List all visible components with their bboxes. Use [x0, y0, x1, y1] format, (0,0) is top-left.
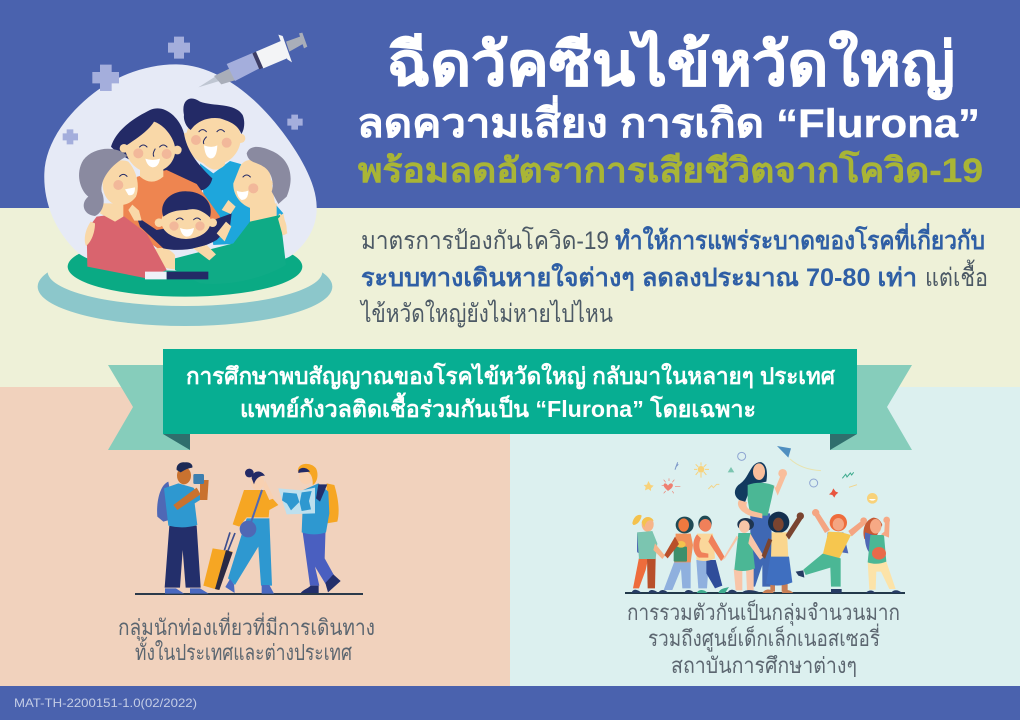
icon: plus signs: [63, 37, 303, 144]
title: [357, 29, 983, 190]
panel: footer bar: [0, 686, 1020, 720]
person: mother: [111, 108, 220, 250]
panel: cream intro: [0, 208, 1020, 388]
ground line: [625, 592, 905, 594]
child jumping: [796, 509, 867, 593]
panel: top blue header: [0, 0, 1020, 208]
child with ponytail: [632, 515, 665, 593]
text block: children caption: การรวมตัวกันเป็นกลุ่มจำนวนมาก: [627, 598, 900, 626]
platform base: [38, 237, 332, 326]
person: grandfather: [148, 147, 291, 284]
person: child: [128, 191, 236, 279]
text block: intro: ไข้หวัดใหญ่ยังไม่หายไปไหน: [359, 299, 613, 328]
child with red bag: [863, 517, 902, 593]
illustration: teacher and children: [625, 446, 905, 593]
child in yellow shirt: [693, 516, 729, 593]
traveller with suitcase: [203, 469, 278, 594]
person: grandmother: [79, 149, 167, 278]
child in green dress: [722, 518, 764, 593]
child in blue skirt: [762, 512, 804, 593]
illustration: travellers: [135, 462, 363, 594]
icon: syringe: [198, 33, 307, 87]
footer code: MAT-TH-2200151-1.0(02/2022): [14, 696, 197, 710]
text block: intro: ทำให้การแพร่ระบาดของโรคที่เกี่ยวกับ: [615, 223, 985, 255]
banner text: การศึกษาพบสัญญาณของโรคไข้หวัดใหญ่ กลับมาในหลายๆ ประเทศ: [186, 362, 835, 390]
panel: children background: [510, 387, 1020, 686]
text block: intro: [359, 223, 988, 328]
protective dome: [44, 64, 317, 271]
ground line: [135, 593, 363, 595]
banner text: [186, 362, 835, 422]
child with book: [658, 517, 694, 593]
illustration: family protected in dome: [38, 33, 332, 326]
title: ฉีดวัคซีนไข้หวัดใหญ่: [387, 29, 955, 100]
text block: children caption: [627, 598, 900, 678]
person: father: [182, 98, 283, 245]
text block: intro: แต่เชื้อ: [925, 259, 988, 292]
subtitle: ลดความเสี่ยง การเกิด “Flurona”: [357, 95, 980, 146]
text block: intro: มาตรการป้องกันโควิด-19: [361, 226, 609, 255]
text block: travellers caption: กลุ่มนักท่องเที่ยวที่มีการเดินทาง: [118, 612, 375, 641]
traveller with map: [278, 464, 341, 593]
text block: travellers caption: ทั้งในประเทศและต่างประเทศ: [135, 637, 352, 665]
text block: children caption: รวมถึงศูนย์เด็กเล็กเนอสเซอรี่: [648, 623, 880, 652]
panel: travellers background: [0, 387, 510, 686]
doodles: [644, 446, 878, 504]
subtitle: covid mortality: พร้อมลดอัตราการเสียชีวิตจากโควิด-19: [358, 150, 983, 190]
teacher: [735, 462, 787, 587]
banner text: แพทย์กังวลติดเชื้อร่วมกันเป็น “Flurona” โดยเฉพาะ: [240, 392, 756, 422]
text block: intro: ระบบทางเดินหายใจต่างๆ ลดลงประมาณ 70-80 เท่า: [361, 262, 917, 292]
text block: children caption: สถาบันการศึกษาต่างๆ: [671, 653, 857, 678]
text block: travellers caption: [118, 612, 375, 665]
ribbon banner: [108, 349, 912, 450]
traveller with camera: [157, 462, 209, 594]
